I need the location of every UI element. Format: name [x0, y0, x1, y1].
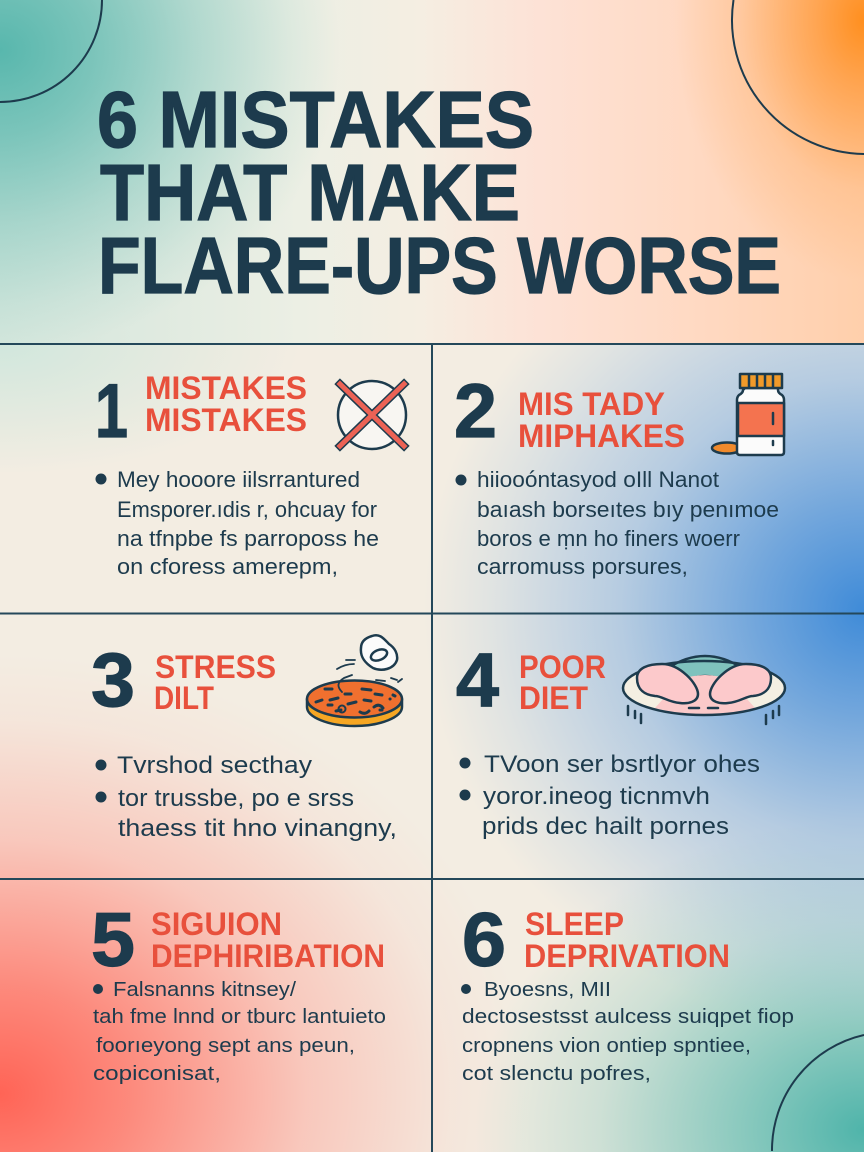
title: THAT MAKE [100, 148, 520, 237]
panel: mistake 6 [461, 898, 794, 1085]
bullet text 4: yoror.ineog ticnmvh [483, 783, 710, 810]
bullet text 2: boros e ṃn ho finers woerr [477, 526, 740, 551]
icon: plate with food [623, 656, 785, 724]
heading 4: DIET [519, 680, 588, 716]
bullet text 2 [456, 467, 779, 579]
bullet text 3: tor trussbe, po e srss [118, 785, 354, 812]
number 5: 5 [91, 898, 135, 983]
number 1: 1 [95, 369, 128, 454]
bullet text 6: cropnens vion ontiep spntiee, [462, 1035, 751, 1057]
heading 6: SLEEP [525, 906, 624, 942]
panel: mistake 5 [91, 898, 386, 1085]
bullet text 5: Falsnanns kitnsey/ [113, 979, 296, 1001]
heading 5: SIGUION [151, 906, 282, 942]
panel: mistake 3 [91, 635, 402, 842]
number 3: 3 [91, 638, 135, 723]
bullet text 4 [460, 751, 760, 840]
heading 2 [518, 386, 685, 454]
bullet text 1 [96, 467, 379, 579]
heading 5: DEPHIRIBATION [151, 938, 385, 974]
bullet text 5: foorıeyong sept ans peun, [96, 1035, 355, 1057]
heading 3: STRESS [155, 649, 276, 685]
bullet text 4: TVoon ser bsrtlyor ohes [484, 751, 760, 778]
heading 3 [154, 649, 276, 716]
heading 2: MIS TADY [518, 386, 665, 422]
bullet text 6: cot slenctu pofres, [462, 1063, 651, 1085]
bullet text 3: thaess tit hno vinangny, [118, 815, 397, 842]
bullet text 3: Tvrshod secthay [117, 752, 312, 779]
icon: crossed-out plate [338, 381, 406, 449]
heading 6 [524, 906, 730, 974]
heading 4: POOR [519, 649, 606, 685]
panel: mistake 1 [95, 369, 406, 579]
title: 6 MISTAKES [97, 75, 534, 164]
heading 1 [145, 370, 307, 438]
heading 2: MIPHAKES [518, 418, 685, 454]
title: FLARE-UPS WORSE [98, 221, 781, 310]
bullet text 2: baıash borseıtes bıy penımoe [477, 497, 779, 522]
bullet text 1: na tfnpbe fs parroposs he [117, 526, 379, 551]
bullet text 6: dectosestsst aulcess suiqpet fiop [462, 1006, 794, 1028]
bullet text 1: on cforess amerepm, [117, 554, 338, 579]
number 4: 4 [456, 638, 499, 723]
heading 3: DILT [154, 680, 214, 716]
bullet text 4: prids dec hailt pornes [482, 813, 729, 840]
heading 5 [151, 906, 385, 974]
bullet text 2: carromuss porsures, [477, 554, 688, 579]
heading 6: DEPRIVATION [524, 938, 730, 974]
bullet text 1: Mey hooore iilsrrantured [117, 467, 360, 492]
heading 4 [519, 649, 606, 716]
icon: pizza and egg [307, 635, 402, 726]
number 6: 6 [462, 898, 506, 983]
icon: pill bottle [712, 374, 784, 455]
title [97, 75, 781, 310]
heading 1: MISTAKES [145, 370, 307, 406]
bullet text 1: Emsporer.ıdis r, ohcuay for [117, 497, 377, 522]
bullet text 6 [461, 979, 794, 1085]
bullet text 2: hiiooóntasyod oIll Nanot [477, 467, 719, 492]
bullet text 3 [96, 752, 397, 842]
bullet text 5: tah fme lnnd or tburc lantuieto [93, 1006, 386, 1028]
bullet text 5: copiconisat, [93, 1063, 221, 1085]
bullet text 6: Byoesns, MII [484, 979, 611, 1001]
bullet text 5 [93, 979, 386, 1085]
panel: mistake 2 [454, 369, 784, 579]
heading 1: MISTAKES [145, 402, 307, 438]
number 2: 2 [454, 369, 497, 454]
panel: mistake 4 [456, 638, 785, 840]
